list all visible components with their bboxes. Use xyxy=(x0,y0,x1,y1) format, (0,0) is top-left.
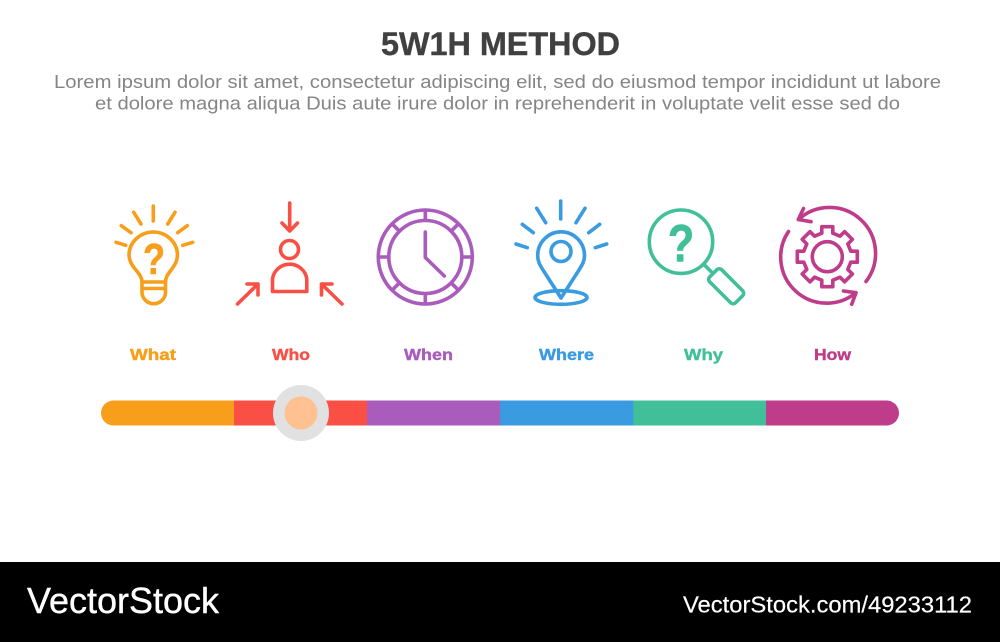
labels: What xyxy=(130,347,176,364)
icon: map pin with rays xyxy=(516,201,607,304)
timeline bar xyxy=(101,400,899,426)
icon: magnifying glass with question mark: ? xyxy=(668,214,694,274)
labels: Where xyxy=(539,347,594,364)
subtitle text block: Lorem ipsum dolor sit amet, consectetur adipiscing elit, sed do eiusmod tempor incididunt ut labore xyxy=(54,72,941,92)
footer band: VectorStock.com/49233112 xyxy=(683,592,972,618)
icon: gear with cycle arrows xyxy=(781,207,876,304)
footer band: VectorStock xyxy=(27,580,220,621)
icon: person with incoming arrows xyxy=(238,203,342,304)
labels: Why xyxy=(684,347,723,364)
subtitle text block: et dolore magna aliqua Duis aute irure dolor in reprehenderit in voluptate velit esse sed do xyxy=(95,94,900,114)
icon: light bulb with question mark xyxy=(116,206,193,304)
subtitle text block xyxy=(54,72,941,114)
slider knob xyxy=(273,385,329,441)
icon: magnifying glass with question mark xyxy=(649,210,745,305)
labels: When xyxy=(404,347,453,364)
labels xyxy=(130,347,852,364)
labels: Who xyxy=(272,347,310,364)
footer band xyxy=(0,562,1000,642)
icon: clock xyxy=(378,210,472,304)
labels: How xyxy=(814,347,852,364)
title: 5W1H METHOD xyxy=(381,26,620,62)
icon: light bulb with question mark: ? xyxy=(143,235,165,284)
